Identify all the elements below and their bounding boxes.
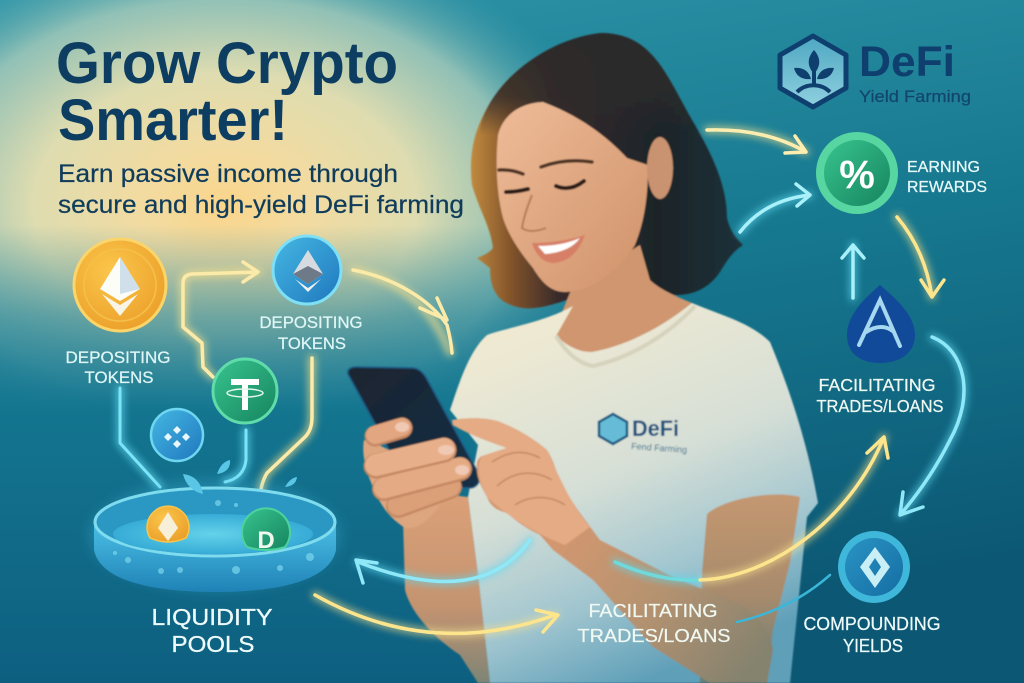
- shirt logo: DeFi: [632, 416, 679, 441]
- coin: gold ethereum: [74, 239, 166, 331]
- label: depositing tokens center: TOKENS: [278, 334, 346, 353]
- woman figure: [348, 33, 818, 683]
- smile: [532, 235, 585, 263]
- nose: [522, 195, 546, 231]
- cyan lines: to pool: [120, 388, 246, 487]
- label: compounding yields: YIELDS: [843, 636, 903, 656]
- label: facilitating trades right: [816, 375, 944, 416]
- thin cyan link: [737, 575, 830, 622]
- cyan arrow up: [842, 245, 864, 298]
- coin: green tether: [213, 359, 277, 423]
- yellow arrow from rewards: [897, 217, 944, 297]
- droplets: [183, 460, 297, 494]
- left forearm: [403, 495, 490, 683]
- yellow arrow: token to phone: [353, 270, 452, 353]
- sunken gold coin: [147, 506, 189, 542]
- label: facilitating trades bottom: TRADES/LOANS: [578, 625, 730, 646]
- holding hand: [363, 427, 460, 528]
- water: [113, 514, 313, 554]
- logo wordmark: DeFi: [859, 38, 955, 86]
- label: facilitating trades bottom: FACILITATING: [588, 600, 718, 621]
- phone: [348, 367, 480, 488]
- face: [497, 102, 648, 292]
- label: liquidity pools: LIQUIDITY: [152, 604, 272, 630]
- pool glow: [90, 480, 340, 590]
- subtitle: Earn passive income through: [58, 160, 398, 188]
- coin: blue binance: [151, 409, 203, 461]
- yellow line: to pool: [260, 358, 312, 500]
- ear: [647, 137, 673, 199]
- fist highlight: [452, 418, 590, 545]
- shirt collar: [556, 306, 695, 366]
- label: depositing tokens left: DEPOSITING: [66, 348, 170, 367]
- yellow arrow to rewards: [707, 130, 806, 153]
- label: liquidity pools: POOLS: [172, 631, 254, 657]
- shirt logo: [599, 414, 687, 455]
- label: facilitating trades bottom: [578, 600, 730, 646]
- coin: compounding diamond: [838, 531, 910, 603]
- eyes: [506, 181, 584, 192]
- label: compounding yields: [804, 614, 940, 656]
- hair: [471, 33, 743, 308]
- neck: [550, 245, 692, 358]
- fingernails: [395, 422, 469, 475]
- sunken green coin: D: [257, 527, 275, 554]
- coin: percent rewards: %: [839, 153, 875, 197]
- right and bottom flow arrows: [315, 130, 964, 633]
- label: facilitating trades right: TRADES/LOANS: [816, 396, 944, 416]
- title: Grow Crypto: [56, 31, 398, 96]
- pool bubbles: [113, 500, 314, 574]
- subtitle: secure and high-yield DeFi farming: [58, 191, 464, 219]
- coin: blue ethereum: [273, 236, 341, 304]
- label: earning rewards: REWARDS: [907, 179, 987, 196]
- coin: percent rewards: [816, 132, 898, 214]
- t-shirt: [450, 303, 818, 683]
- label: earning rewards: EARNING: [907, 159, 980, 176]
- pointing hand and forearm: [452, 418, 773, 683]
- arrow glow layers: [120, 270, 450, 500]
- cyan arrow to rewards: [740, 184, 810, 232]
- logo: DeFi Yield Farming: [780, 36, 971, 107]
- label: compounding yields: COMPOUNDING: [804, 614, 940, 634]
- label: liquidity pools: [152, 604, 272, 657]
- title: [56, 31, 398, 153]
- cyan long arrow down: [900, 337, 964, 515]
- palm: [363, 440, 445, 528]
- hair crown shading: [480, 33, 695, 140]
- fingers: [398, 487, 450, 506]
- icon: hexagon sprout: [780, 36, 846, 107]
- fist finger lines: [492, 452, 565, 505]
- label: depositing tokens center: DEPOSITING: [260, 313, 362, 332]
- eyebrows: [499, 161, 592, 174]
- label: depositing tokens left: [66, 348, 170, 387]
- pool rim: [95, 488, 335, 556]
- yellow arrow to trades: [315, 595, 558, 633]
- token: anvil shield: [847, 285, 915, 363]
- shirt logo: Fend Farming: [631, 441, 687, 455]
- right upper arm: [700, 494, 800, 683]
- cyan arrow to pool: [356, 540, 530, 583]
- label: facilitating trades right: FACILITATING: [818, 375, 936, 395]
- label: depositing tokens left: TOKENS: [84, 368, 154, 387]
- left flow arrows: [120, 262, 452, 500]
- label: depositing tokens center: [260, 313, 362, 353]
- label: earning rewards: [907, 159, 987, 196]
- sunken green coin: [242, 508, 290, 554]
- arrow glow layers: [315, 130, 964, 633]
- yellow long arrow up: [615, 437, 888, 580]
- title: Smarter!: [58, 88, 288, 153]
- pool body: [94, 522, 336, 592]
- logo tagline: Yield Farming: [859, 87, 971, 106]
- panel: liquidity pool: [90, 460, 340, 592]
- subtitle: [58, 160, 464, 219]
- yellow arrow: to second token: [183, 262, 258, 377]
